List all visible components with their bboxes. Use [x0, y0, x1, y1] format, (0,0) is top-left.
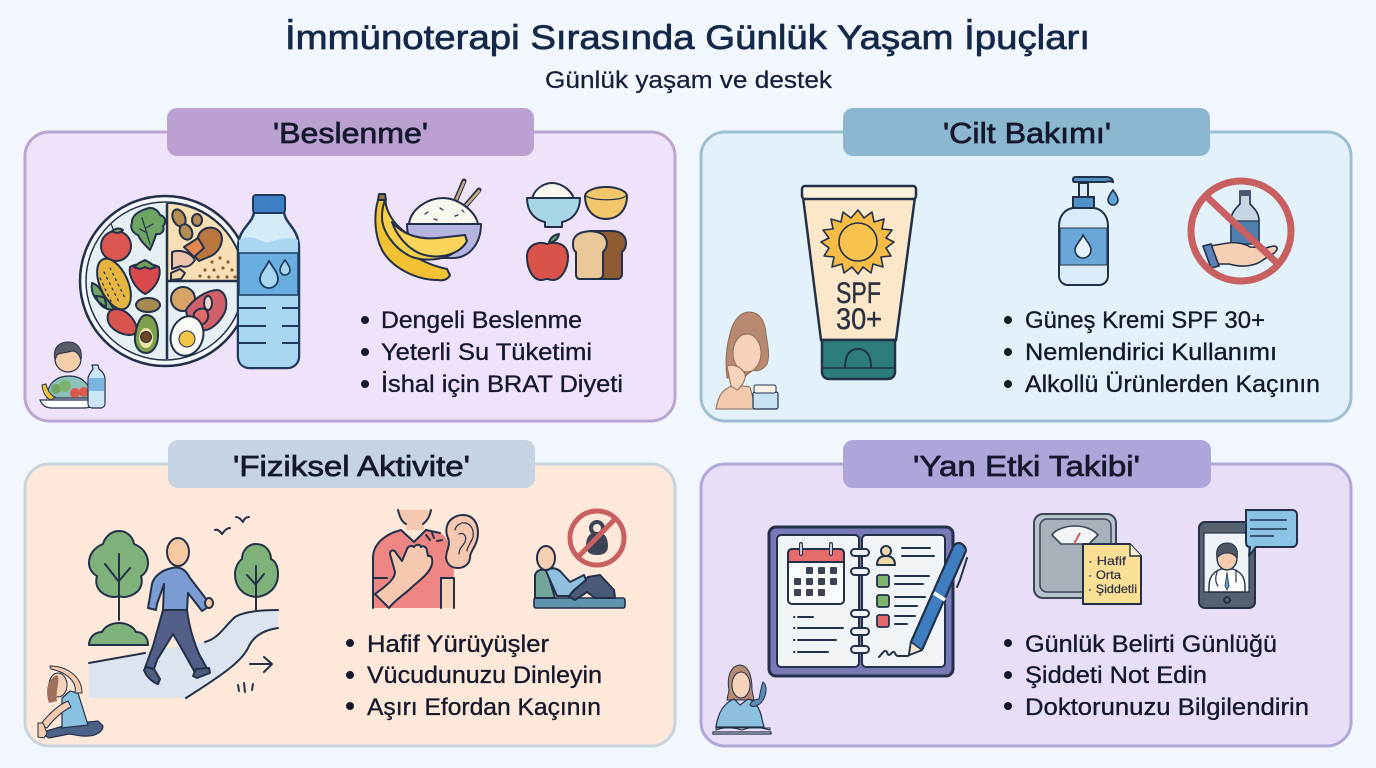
icon: scale with severity note: · Orta [1088, 568, 1121, 582]
icon: scale with severity note: · Şiddetli [1088, 582, 1137, 596]
panel header [168, 440, 535, 488]
panel: Yan Etki Takibi [701, 440, 1351, 746]
panel background [701, 132, 1351, 421]
subtitle: Günlük yaşam ve destek [545, 67, 833, 94]
icon: food plate [80, 196, 250, 366]
panel header: 'Fiziksel Aktivite' [233, 451, 470, 483]
icon: banana and rice bowl [375, 181, 481, 280]
list: Cilt Bakımı: Alkollü Ürünlerden Kaçının [1025, 371, 1320, 398]
list: Cilt Bakımı: Güneş Kremi SPF 30+ [1025, 307, 1265, 334]
list: Beslenme: Dengeli Beslenme [381, 307, 582, 334]
list: Fiziksel Aktivite: Hafif Yürüyüşler [367, 631, 549, 658]
panel: Beslenme [25, 108, 675, 421]
list: Fiziksel Aktivite: Aşırı Efordan Kaçının [367, 694, 601, 721]
list: Cilt Bakımı [1004, 307, 1320, 398]
panel header: 'Yan Etki Takibi' [913, 451, 1140, 483]
icon: symptom journal [769, 527, 967, 676]
icon: sunscreen tube: SPF [836, 277, 881, 310]
list: Yan Etki Takibi [1004, 631, 1309, 721]
icon: sunscreen tube [802, 186, 916, 379]
list: Cilt Bakımı: Nemlendirici Kullanımı [1025, 339, 1277, 366]
list: Beslenme: Yeterli Su Tüketimi [381, 339, 592, 366]
list: Fiziksel Aktivite [346, 631, 602, 721]
panel: Cilt Bakımı [701, 108, 1351, 421]
panel background [25, 132, 675, 421]
icon: person eating [40, 342, 105, 408]
icon: scale with severity note: · Hafif [1088, 554, 1127, 568]
panel header: 'Beslenme' [273, 118, 428, 150]
panel background [25, 464, 675, 746]
list: Yan Etki Takibi: Şiddeti Not Edin [1025, 662, 1207, 689]
icon: woman applying cream [716, 312, 778, 409]
list: Yan Etki Takibi: Doktorunuzu Bilgilendirin [1025, 694, 1309, 721]
list: Fiziksel Aktivite: Vücudunuzu Dinleyin [367, 662, 602, 689]
icon: no alcohol products [1190, 180, 1292, 282]
list: Beslenme [361, 307, 623, 398]
icon: sunscreen tube: 30+ [836, 303, 882, 336]
icon: scale with severity note [1034, 514, 1141, 604]
icon: listen to your body [373, 510, 478, 608]
icon: stretching woman [38, 666, 103, 738]
panel header [167, 108, 534, 156]
icon: moisturizer pump [1059, 177, 1118, 285]
panel header: 'Cilt Bakımı' [943, 118, 1111, 150]
list: Yan Etki Takibi: Günlük Belirti Günlüğü [1025, 631, 1277, 658]
panel: Fiziksel Aktivite [25, 440, 675, 746]
title: İmmünoterapi Sırasında Günlük Yaşam İpuçları [285, 19, 1090, 57]
icon: rest instead of heavy exercise [534, 511, 625, 608]
icon: water bottle [238, 195, 299, 368]
icon: walking on a path [89, 517, 278, 698]
panel background [701, 464, 1351, 746]
icon: doctor video call [1199, 510, 1297, 608]
list: Beslenme: İshal için BRAT Diyeti [381, 371, 623, 398]
panel header [843, 440, 1211, 488]
icon: woman writing and phoning [713, 665, 771, 734]
icon: BRAT foods [527, 183, 627, 280]
panel header [843, 108, 1210, 156]
